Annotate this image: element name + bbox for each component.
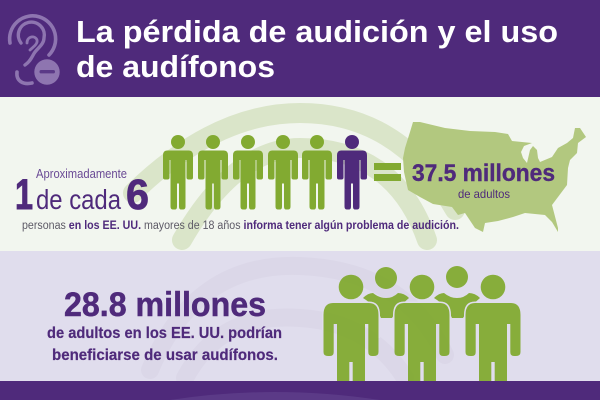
stat: 1 de cada 6: de cada xyxy=(36,184,121,215)
stat: 1 de cada 6: Aproximadamente xyxy=(36,167,127,181)
title: La pérdida de audición y el uso xyxy=(76,14,558,49)
text block: benefit: de adultos en los EE. UU. podrían xyxy=(47,325,282,342)
panel: header xyxy=(0,0,600,97)
faint waves xyxy=(150,266,445,378)
sound waves xyxy=(133,113,455,240)
map: United States xyxy=(403,122,586,232)
stat: 1 de cada 6: 1 xyxy=(15,171,33,219)
people group xyxy=(324,266,520,388)
label: de adultos: de adultos xyxy=(458,187,510,201)
stat: 1 de cada 6 xyxy=(15,167,149,219)
icon: ear with minus sign xyxy=(10,16,60,85)
panel: bottom band xyxy=(0,381,600,400)
stat: 37.5 millones: 37.5 millones xyxy=(412,160,555,187)
stat: 28.8 millones: 28.8 millones xyxy=(64,286,266,324)
title: de audífonos xyxy=(76,49,275,84)
people row: one in six xyxy=(163,135,367,210)
panel: hearing aid candidates xyxy=(0,251,600,388)
equals sign xyxy=(374,163,401,181)
stat: 1 de cada 6: 6 xyxy=(126,171,149,219)
text block: benefit: beneficiarse de usar audífonos. xyxy=(52,347,278,364)
panel: prevalence xyxy=(0,97,600,251)
caption: personas en los EE. UU. mayores de 18 años informa tener algún problema de audición. xyxy=(22,220,459,232)
